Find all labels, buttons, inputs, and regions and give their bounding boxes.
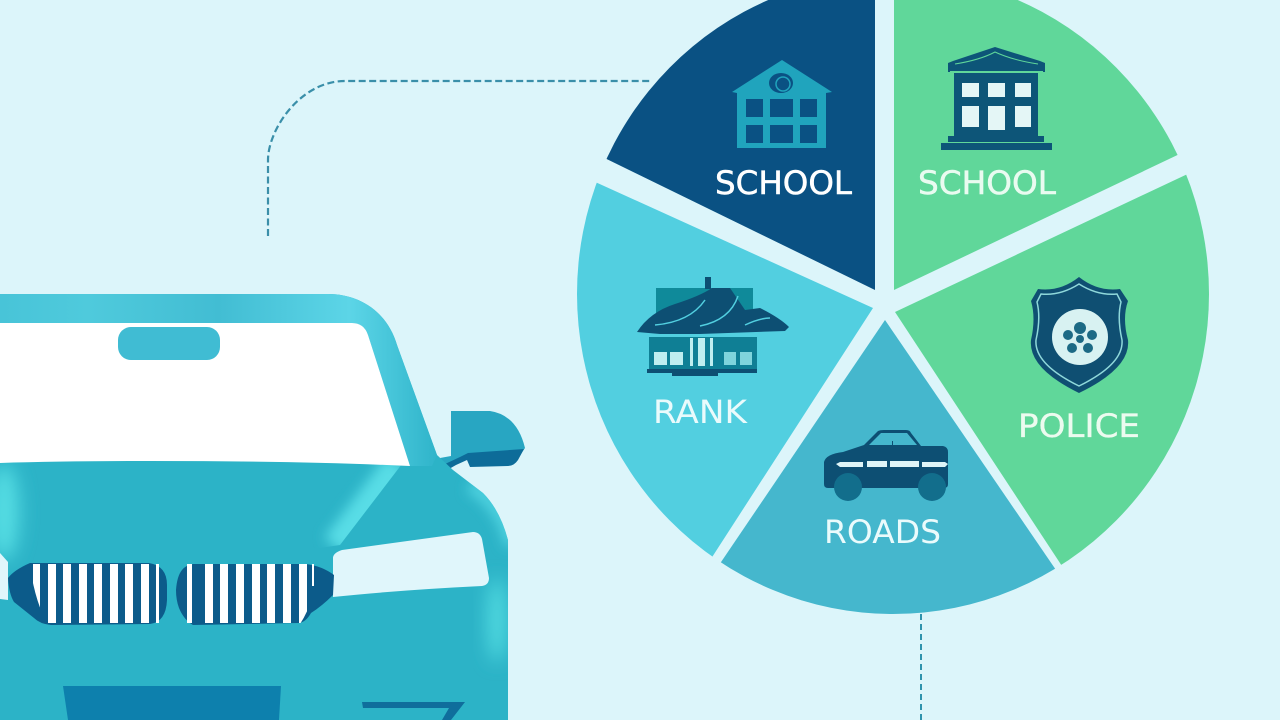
headlight left <box>0 553 8 600</box>
side mirror <box>440 411 525 469</box>
numeral mark <box>362 702 465 720</box>
rear-view mirror <box>118 327 220 360</box>
grille left <box>8 563 167 625</box>
license plate <box>63 686 281 720</box>
headlight right <box>333 532 489 597</box>
dashed connector: car to pie <box>268 81 650 236</box>
car body <box>0 294 508 720</box>
icon: school house <box>732 60 832 148</box>
label: school: SCHOOL <box>715 164 852 202</box>
label: rank: RANK <box>653 393 748 431</box>
slice: rank teal <box>577 182 873 556</box>
dashed connector: pie downward <box>920 614 922 720</box>
car illustration <box>0 294 525 720</box>
slice: school navy <box>606 0 875 290</box>
icon: police badge <box>1031 277 1128 393</box>
windshield <box>0 323 410 466</box>
icon: columned building <box>941 47 1052 150</box>
grille right <box>176 564 334 625</box>
label: roads: ROADS <box>824 513 941 551</box>
body highlights <box>0 464 512 662</box>
label: police: POLICE <box>1018 407 1140 445</box>
car roof band <box>0 294 437 466</box>
icon: bank building <box>637 277 789 376</box>
slice: police green <box>895 174 1209 565</box>
label: school: SCHOOL <box>918 164 1056 202</box>
slice: school green <box>894 0 1178 290</box>
icon: car <box>824 430 948 501</box>
slice: roads teal <box>720 320 1056 614</box>
pie chart <box>577 0 1209 614</box>
